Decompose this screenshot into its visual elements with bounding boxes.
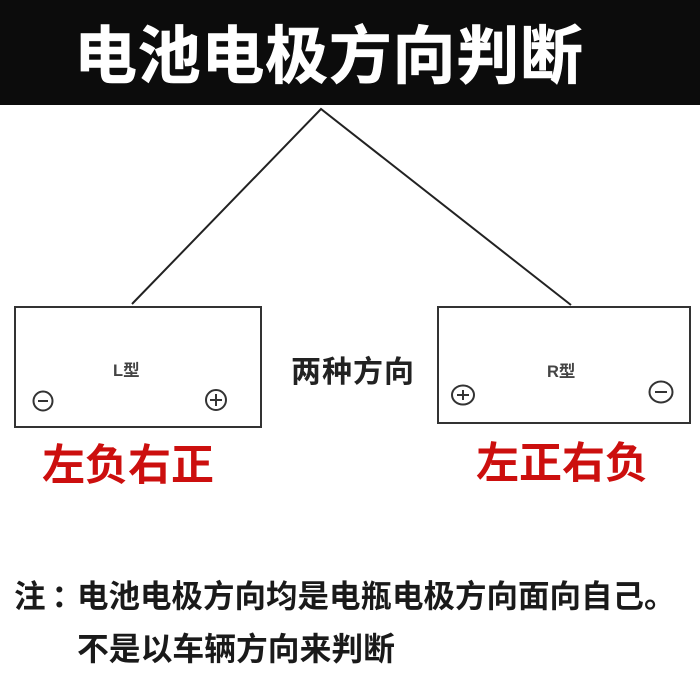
center label: two directions: 两种方向 bbox=[291, 356, 415, 389]
icon: minus terminal bbox=[32, 390, 54, 412]
icon: minus terminal bbox=[648, 380, 674, 404]
icon: plus terminal bbox=[205, 389, 227, 411]
title banner bbox=[0, 0, 700, 105]
label: L type: L型 bbox=[113, 362, 140, 380]
note line 2: 不是以车辆方向来判断 bbox=[77, 631, 395, 667]
note line 1: 注：电池电极方向均是电瓶电极方向面向自己。 bbox=[14, 578, 676, 614]
icon: plus terminal bbox=[451, 384, 475, 406]
label: R type: R型 bbox=[547, 363, 575, 381]
panel: R-type battery bbox=[437, 306, 691, 424]
red label: left positive right negative: 左正右负 bbox=[476, 440, 648, 488]
panel: L-type battery bbox=[14, 306, 262, 428]
title: 电池电极方向判断 bbox=[74, 22, 584, 92]
red label: left negative right positive: 左负右正 bbox=[42, 442, 214, 490]
